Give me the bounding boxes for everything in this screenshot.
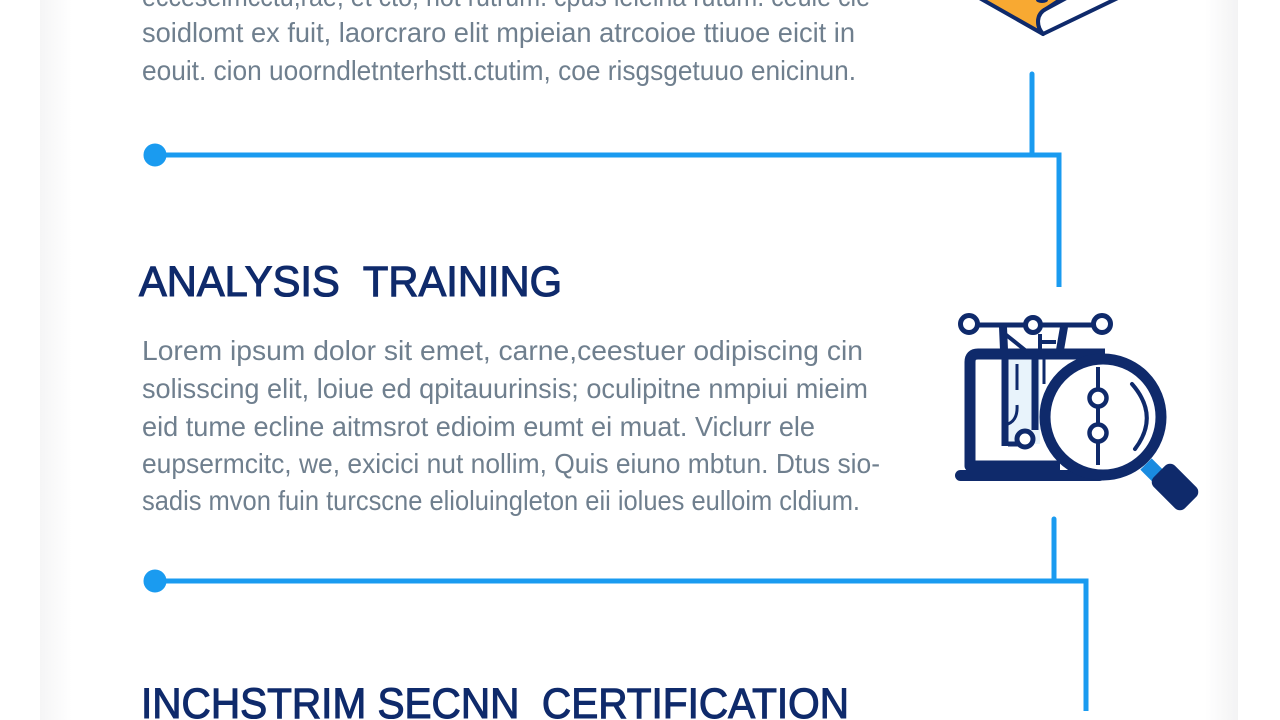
- text block: first section body: [142, 0, 870, 86]
- text block: analysis training body: solisscing elit, loiue ed qpitauurinsis; oculipitne nmpiui mieim: [142, 373, 868, 404]
- text block: analysis training body: eupsermcitc, we, exicici nut nollim, Quis eiuno mbtun. Dtus sio-: [142, 448, 880, 479]
- text block: analysis training body: sadis mvon fuin turcscne elioluingleton eii iolues eulloim cldium.: [142, 485, 860, 516]
- text block: analysis training body: Lorem ipsum dolor sit emet, carne,ceestuer odipiscing cin: [142, 335, 863, 366]
- text block: analysis training body: [142, 335, 880, 516]
- icon: circuit machine under magnifying glass: [955, 316, 1201, 513]
- text block: first section body: eouit. cion uoorndletnterhstt.ctutim, coe risgsgetuuo enicinun.: [142, 55, 856, 86]
- text block: first section body: soidlomt ex fuit, laorcraro elit mpieian atrcoioe ttiuoe eicit in: [142, 17, 855, 48]
- heading: analysis training: ANALYSIS TRAINING: [139, 258, 562, 306]
- text block: analysis training body: eid tume ecline aitmsrot edioim eumt ei muat. Viclurr ele: [142, 411, 815, 442]
- arrow: connector from analysis training to certification: [146, 519, 1086, 711]
- arrow: connector from first section to analysis training: [146, 74, 1059, 287]
- magnifier handle: [1146, 464, 1160, 478]
- magnifier lens: [1045, 359, 1161, 475]
- icon: open book: [976, 0, 1122, 34]
